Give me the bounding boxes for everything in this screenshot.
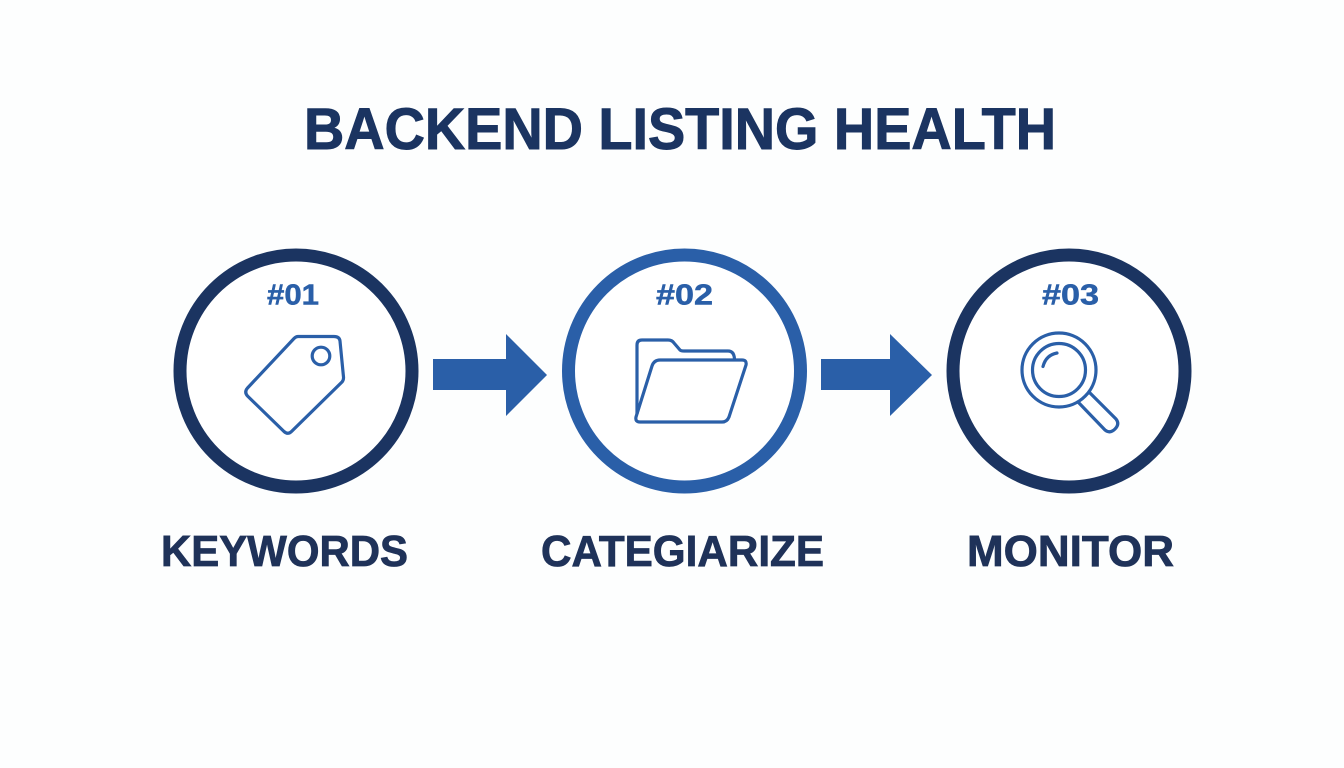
step number 03: #03 <box>1042 280 1099 312</box>
icon: magnifying glass <box>1022 333 1118 432</box>
label: monitor: MONITOR <box>967 527 1174 576</box>
step 2: categorize <box>541 255 824 576</box>
step number 02: #02 <box>656 280 713 312</box>
step 1: keywords <box>161 255 412 576</box>
arrow 2 <box>821 334 932 416</box>
icon: price tag <box>246 336 344 433</box>
label: categiarize: CATEGIARIZE <box>541 527 824 576</box>
step number 01: #01 <box>267 280 319 312</box>
title: BACKEND LISTING HEALTH <box>304 97 1056 162</box>
circle ring 1 <box>180 255 412 487</box>
label: keywords: KEYWORDS <box>161 527 408 576</box>
circle ring 2 <box>568 255 800 487</box>
step 3: monitor <box>953 255 1185 576</box>
circle ring 3 <box>953 255 1185 487</box>
icon: folder <box>636 340 746 422</box>
arrow 1 <box>433 334 547 416</box>
